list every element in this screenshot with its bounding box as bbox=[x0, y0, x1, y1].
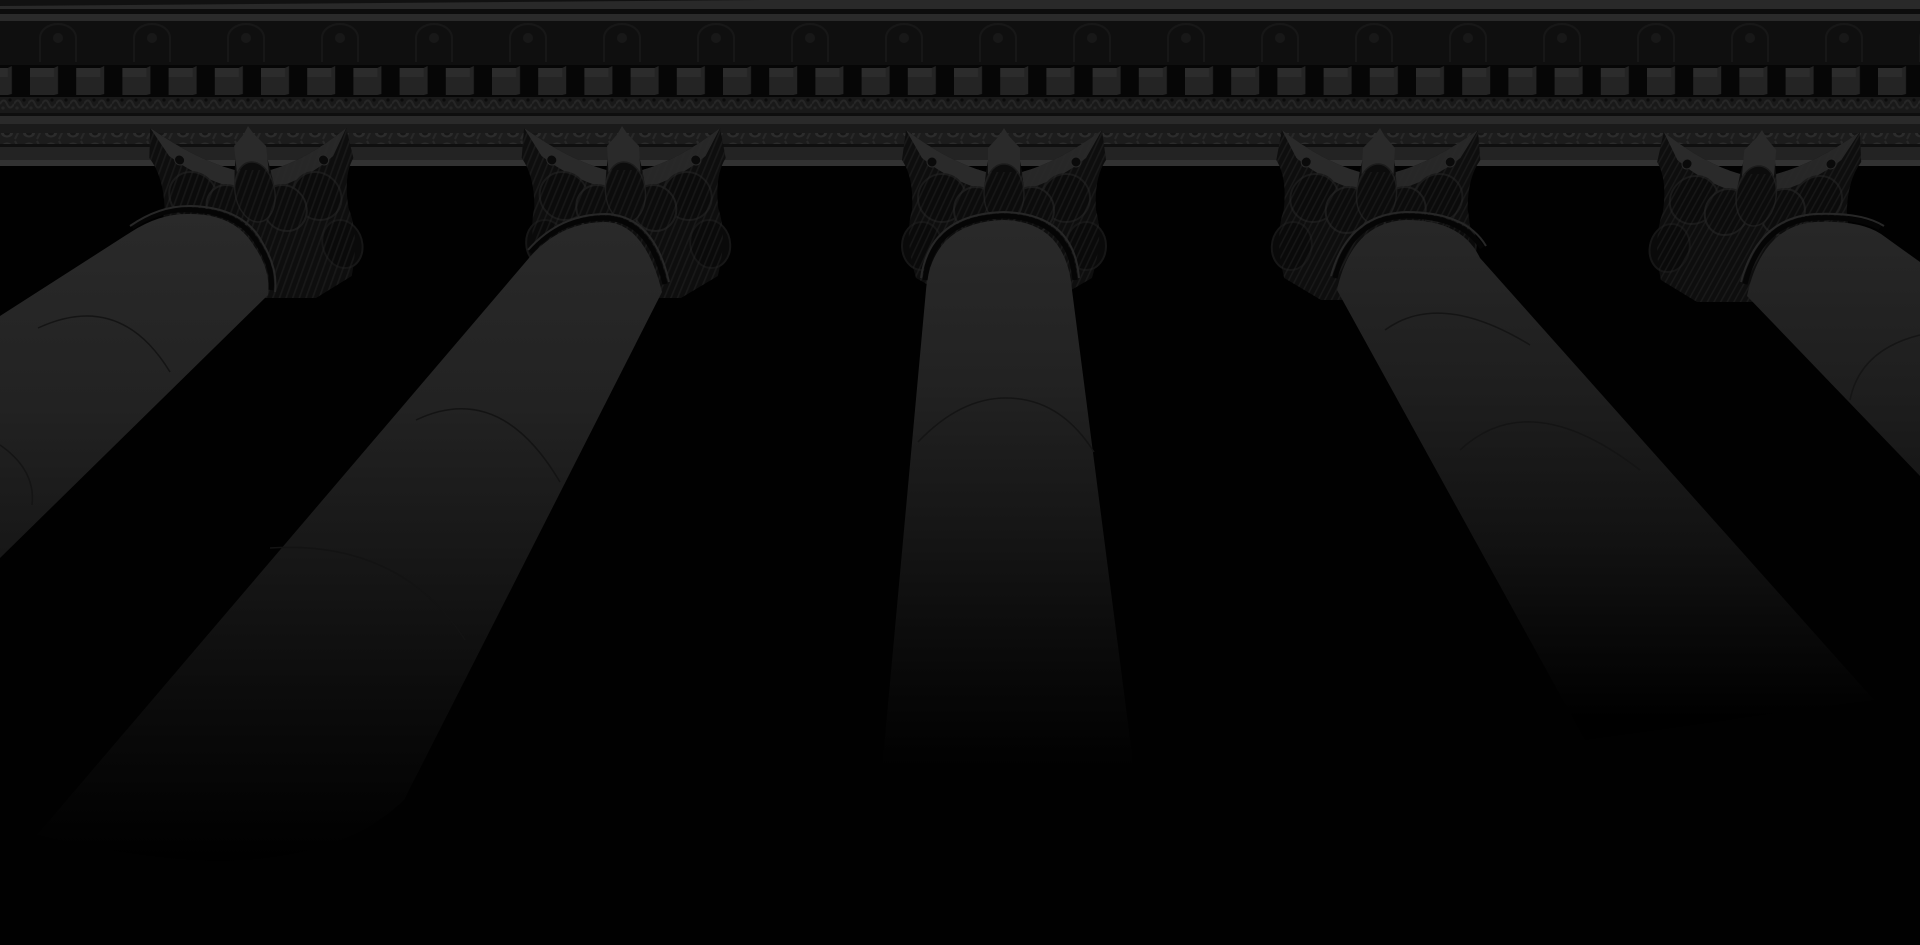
entablature bbox=[0, 0, 1920, 166]
capital 3 bbox=[902, 128, 1106, 300]
column 5 bbox=[1741, 214, 1920, 476]
top band bbox=[0, 0, 1920, 9]
capital 5 bbox=[1645, 130, 1864, 302]
column 1 bbox=[0, 206, 275, 558]
column 2 bbox=[37, 214, 669, 861]
column 3 bbox=[882, 212, 1134, 770]
capital 2 bbox=[520, 126, 733, 298]
capital 4 bbox=[1269, 128, 1482, 300]
capital 1 bbox=[146, 126, 368, 298]
column 4 bbox=[1331, 212, 1874, 740]
dentil row bbox=[0, 65, 1920, 98]
ornament band bbox=[0, 97, 1920, 113]
